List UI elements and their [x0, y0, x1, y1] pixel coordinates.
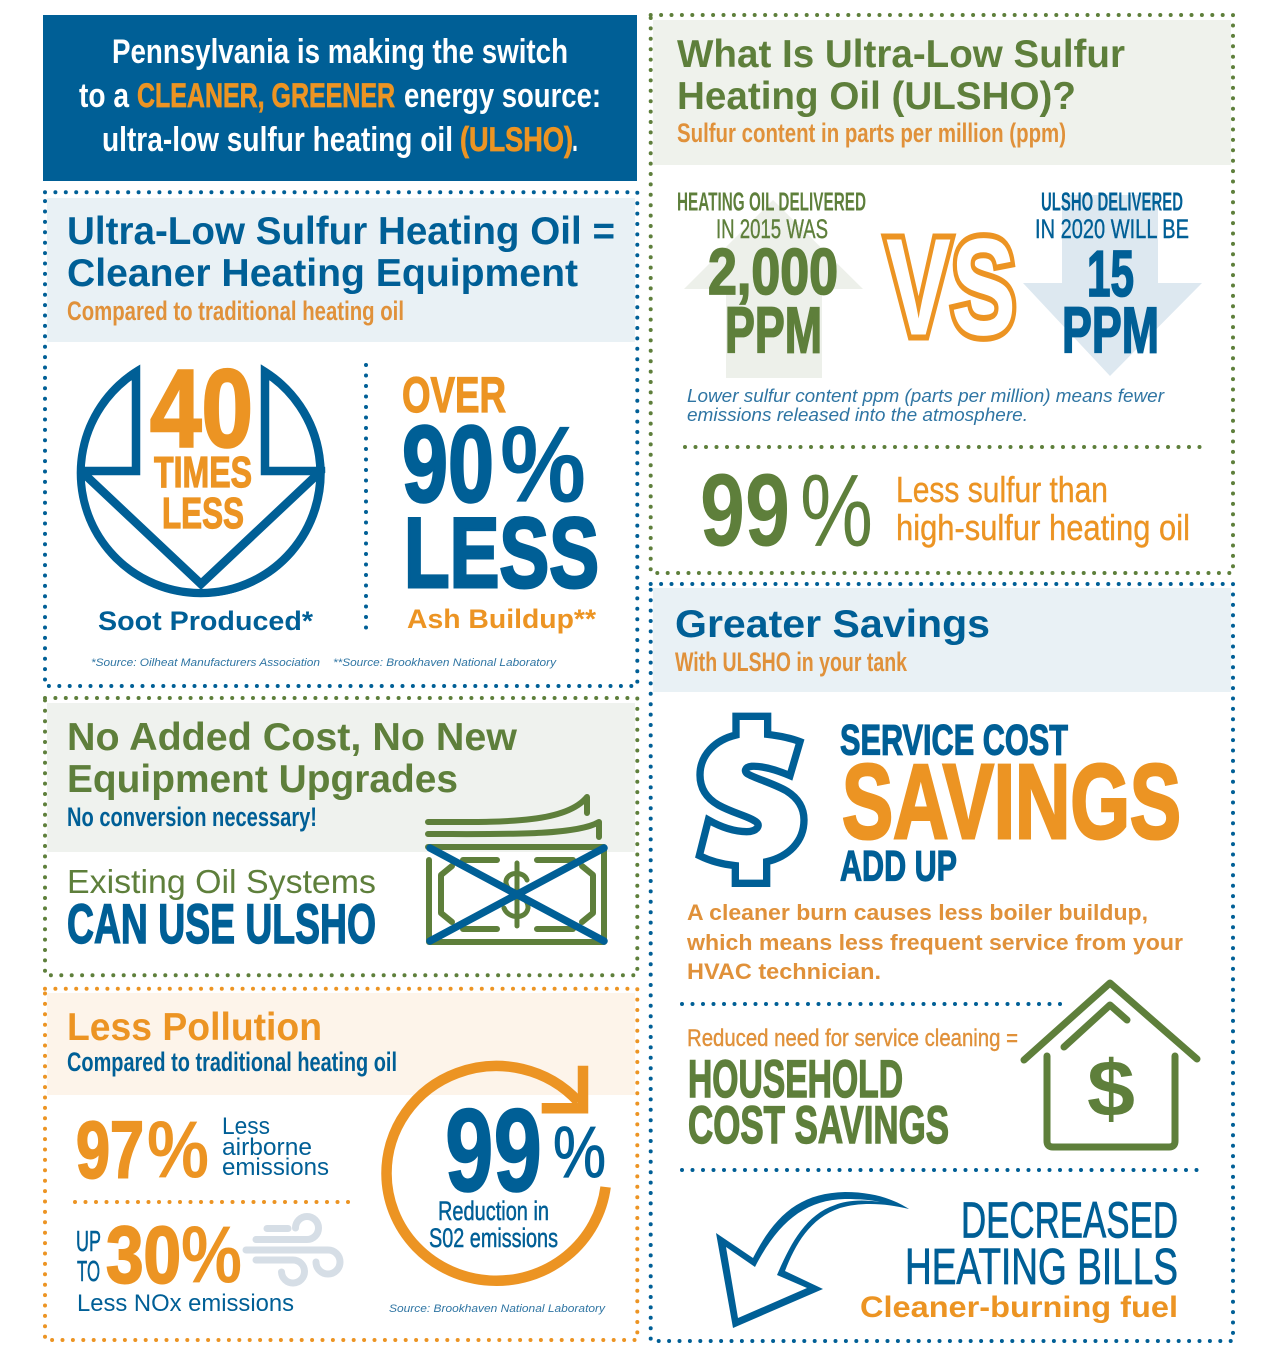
household savings text — [687, 1025, 1018, 1155]
decreased heating bills text: Cleaner-burning fuel — [860, 1291, 1178, 1324]
stat: up to 30 percent: 30 — [106, 1210, 181, 1300]
stat: 40 times less: 40 — [150, 348, 253, 470]
section subheading: Compared to traditional heating oil — [67, 296, 404, 326]
explanation text: HVAC technician. — [687, 959, 881, 984]
stat: over 90 percent less: OVER — [402, 367, 506, 423]
stat: 99 percent less sulfur: 99 — [700, 452, 790, 568]
note: Lower sulfur content ppm (parts per million) means fewer — [687, 386, 1165, 406]
VS outline: VS — [886, 210, 1016, 364]
stat: 2015 heating oil: 2,000 — [708, 235, 838, 308]
stat: 99 percent less sulfur — [700, 452, 1190, 568]
label: soot produced: Soot Produced* — [98, 606, 314, 636]
section subheading: Sulfur content in parts per million (ppm) — [677, 118, 1066, 148]
household savings text: COST SAVINGS — [688, 1096, 949, 1155]
stat: 2020 ULSHO: IN 2020 WILL BE — [1035, 214, 1189, 244]
section heading: Heating Oil (ULSHO)? — [677, 75, 1076, 118]
section heading: Less Pollution — [67, 1006, 322, 1049]
source: Source: Brookhaven National Laboratory — [389, 1303, 607, 1315]
existing systems text — [67, 863, 376, 955]
icon: crossed-out money — [428, 797, 604, 942]
stat: 97 percent: 97 — [76, 1106, 144, 1196]
sources — [91, 657, 558, 669]
sources: **Source: Brookhaven National Laboratory — [333, 657, 558, 669]
stat: 2015 heating oil: HEATING OIL DELIVERED — [677, 186, 866, 216]
stat: 99 percent reduction: 99 — [445, 1085, 542, 1217]
section heading: Ultra-Low Sulfur Heating Oil = — [67, 210, 615, 253]
banner headline: (ULSHO) — [460, 121, 573, 159]
stat: 40 times less — [150, 348, 253, 538]
section subheading: With ULSHO in your tank — [675, 647, 908, 677]
stat: 2020 ULSHO: PPM — [1062, 294, 1159, 366]
section subheading: Compared to traditional heating oil — [67, 1047, 397, 1077]
service cost savings text: SERVICE COST — [840, 716, 1068, 764]
icon: house with dollar — [1024, 983, 1197, 1147]
explanation text — [686, 900, 1183, 984]
stat: 97 percent: emissions — [222, 1154, 329, 1181]
stat: over 90 percent less: % — [500, 404, 586, 526]
stat: over 90 percent less: 90 — [402, 404, 494, 526]
icon: dollar sign — [699, 716, 804, 883]
stat: 2020 ULSHO — [1035, 186, 1189, 366]
section heading — [67, 716, 518, 801]
icon: wind — [246, 1216, 340, 1283]
section heading — [67, 210, 615, 295]
stat: 2020 ULSHO: 15 — [1087, 237, 1134, 310]
stat: up to 30 percent: % — [181, 1210, 242, 1300]
stat: up to 30 percent: TO — [77, 1256, 100, 1288]
arrow: decreasing curve — [716, 1192, 909, 1328]
decreased heating bills text: DECREASED — [961, 1192, 1178, 1248]
panel: intro banner — [43, 15, 637, 181]
service cost savings text: ADD UP — [840, 842, 957, 890]
arrow: down — [1023, 195, 1202, 376]
service cost savings text — [840, 716, 1181, 890]
icon: house with dollar: $ — [1087, 1044, 1135, 1133]
stat: 40 times less: LESS — [162, 489, 244, 538]
icon: circle with down arrow — [81, 372, 321, 593]
stat: 99 percent reduction — [429, 1085, 606, 1253]
panel: what is ULSHO — [651, 15, 1233, 573]
label: ash buildup: Ash Buildup** — [407, 604, 597, 634]
existing systems text: CAN USE ULSHO — [67, 892, 376, 955]
section heading: What Is Ultra-Low Sulfur — [677, 33, 1125, 76]
decreased heating bills text: HEATING BILLS — [905, 1238, 1178, 1295]
existing systems text: Existing Oil Systems — [67, 863, 376, 900]
household savings text: HOUSEHOLD — [688, 1050, 903, 1109]
panel: less pollution — [45, 989, 637, 1340]
stat: 2015 heating oil — [677, 186, 866, 366]
stat: 97 percent: % — [147, 1106, 209, 1196]
stat: over 90 percent less — [402, 367, 599, 608]
stat: 99 percent reduction: Reduction in — [438, 1196, 549, 1226]
banner headline: . — [572, 121, 578, 159]
banner headline: CLEANER, GREENER — [137, 77, 395, 115]
stat: 99 percent less sulfur: Less sulfur than — [896, 469, 1108, 510]
panel: cleaner heating equipment — [45, 192, 637, 686]
stat: 97 percent: airborne — [222, 1134, 312, 1161]
section heading: Equipment Upgrades — [67, 758, 458, 801]
section heading — [677, 33, 1125, 118]
stat: 99 percent reduction: S02 emissions — [429, 1223, 558, 1253]
banner headline: Pennsylvania is making the switch — [112, 33, 568, 71]
arrow: up — [684, 200, 863, 378]
stat: 2015 heating oil: PPM — [725, 294, 822, 366]
note — [687, 386, 1165, 425]
section heading: No Added Cost, No New — [67, 716, 518, 759]
household savings text: Reduced need for service cleaning = — [687, 1025, 1018, 1052]
stat: 99 percent less sulfur: high-sulfur heating oil — [896, 507, 1190, 548]
stat: 99 percent less sulfur: % — [800, 453, 873, 568]
icon: circular arrow — [386, 1066, 606, 1281]
banner headline: energy source: — [404, 77, 601, 115]
panel: greater savings — [651, 584, 1233, 1341]
stat: up to 30 percent: Less NOx emissions — [77, 1290, 294, 1317]
explanation text: which means less frequent service from your — [686, 930, 1183, 955]
stat: up to 30 percent — [76, 1210, 294, 1317]
stat: 97 percent — [76, 1106, 329, 1196]
sources: *Source: Oilheat Manufacturers Association — [91, 657, 320, 669]
stat: 2015 heating oil: IN 2015 WAS — [716, 214, 828, 244]
stat: 97 percent: Less — [222, 1113, 270, 1140]
decreased heating bills text — [860, 1192, 1178, 1324]
banner headline — [79, 33, 601, 159]
panel: no added cost — [45, 698, 637, 975]
stat: 40 times less: TIMES — [154, 448, 252, 497]
section heading: Greater Savings — [675, 603, 990, 646]
stat: 99 percent reduction: % — [553, 1113, 606, 1193]
banner headline: to a — [79, 77, 130, 115]
stat: up to 30 percent: UP — [76, 1226, 101, 1258]
stat: over 90 percent less: LESS — [404, 497, 599, 608]
explanation text: A cleaner burn causes less boiler buildup, — [687, 900, 1148, 925]
banner headline: ultra-low sulfur heating oil — [102, 121, 453, 159]
section heading: Cleaner Heating Equipment — [67, 252, 578, 295]
section subheading: No conversion necessary! — [67, 802, 317, 832]
note: emissions released into the atmosphere. — [687, 405, 1028, 425]
